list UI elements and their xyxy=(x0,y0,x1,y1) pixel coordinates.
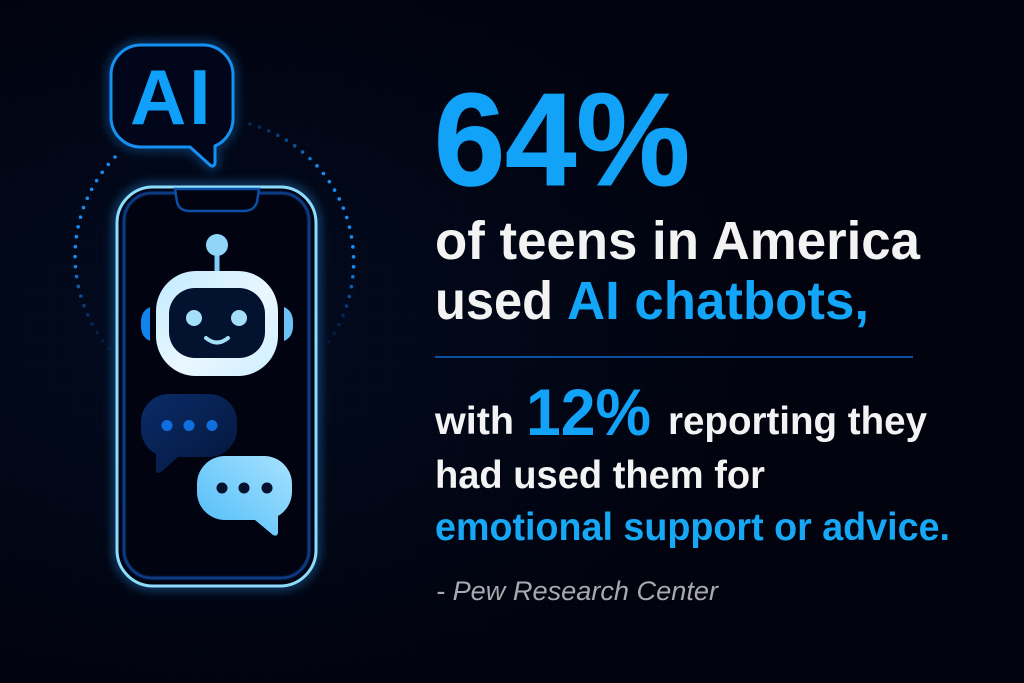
phone xyxy=(117,187,316,586)
secondary statement line 2: had used them for xyxy=(435,454,765,497)
AI speech bubble xyxy=(111,45,233,166)
light chat bubble xyxy=(197,456,292,536)
headline line 1: of teens in America xyxy=(435,211,921,271)
robot head xyxy=(156,271,278,376)
secondary statement line 1: reporting they xyxy=(668,400,927,443)
phone notch xyxy=(175,189,259,211)
secondary statement line 1: with xyxy=(434,400,514,443)
AI label: I xyxy=(189,53,211,141)
headline line 2: AI chatbots, xyxy=(567,271,869,331)
divider xyxy=(435,356,913,358)
robot face xyxy=(186,310,247,342)
dotted orbit circle xyxy=(75,124,354,352)
robot xyxy=(141,234,293,376)
headline line 2 xyxy=(435,271,869,331)
robot ears xyxy=(141,307,293,341)
dark chat bubble xyxy=(141,394,237,473)
secondary statement line 3: emotional support or advice. xyxy=(435,506,950,549)
secondary statement line 1 xyxy=(434,375,927,449)
secondary statement line 1: 12% xyxy=(526,375,651,449)
source attribution: - Pew Research Center xyxy=(436,576,719,606)
headline stat: 64%: 64% xyxy=(434,66,690,213)
phone inner bezel xyxy=(124,193,309,578)
AI label: A xyxy=(130,53,186,141)
robot antenna xyxy=(206,234,228,273)
headline line 2: used xyxy=(435,271,553,331)
